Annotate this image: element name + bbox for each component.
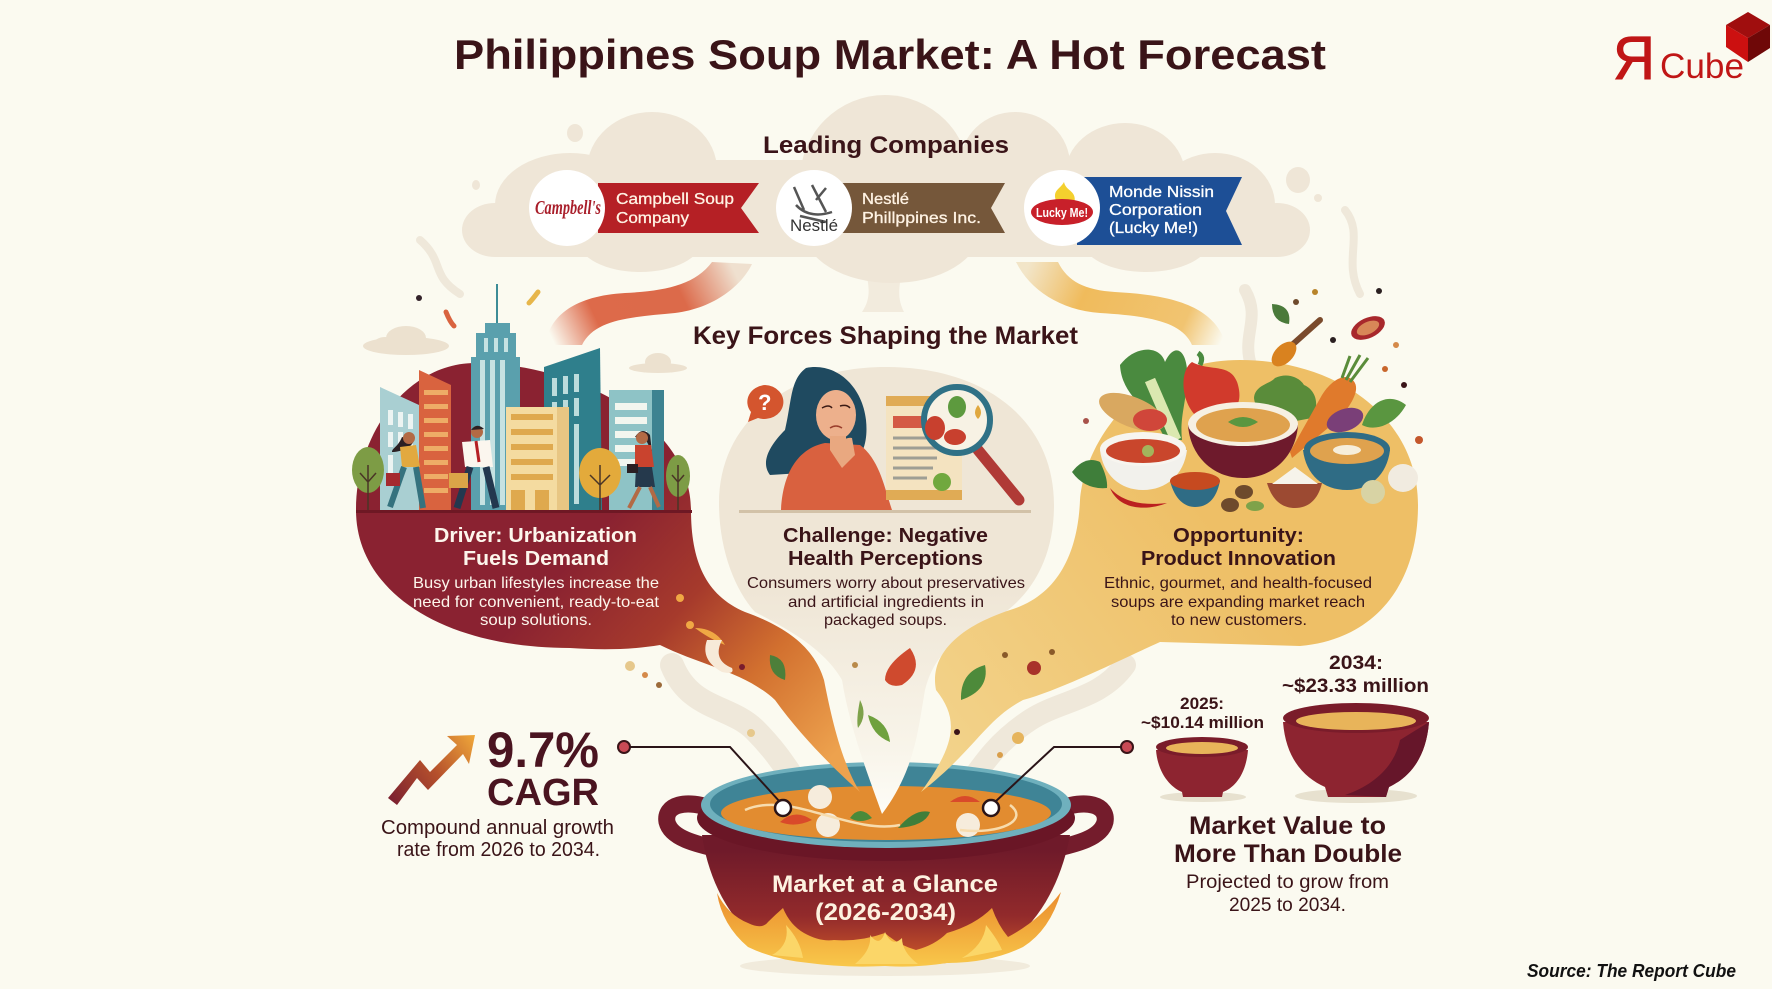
company: Nestle Philippines: Nestlé (790, 216, 838, 235)
illustration: worried woman reading label (739, 367, 1031, 513)
broccoli (1254, 376, 1316, 424)
challenge text: Health Perceptions (788, 548, 983, 570)
text: CAGR description: rate from 2026 to 2034. (397, 839, 600, 861)
company: Campbell Soup Company: Campbell's (535, 197, 601, 219)
label: 2034 value: 2034: (1329, 653, 1383, 674)
driver text: Driver: Urbanization (434, 525, 637, 547)
challenge text: and artificial ingredients in (788, 594, 984, 611)
panel: challenge bubble (719, 367, 1054, 814)
building dark teal (544, 348, 602, 511)
big bowl (1188, 402, 1298, 478)
driver text (413, 525, 660, 629)
garlic (1388, 464, 1418, 492)
company: Monde Nissin: Monde Nissin (1109, 184, 1214, 201)
label: 2034 value: ~$23.33 million (1282, 676, 1429, 697)
trees (352, 447, 384, 493)
logo: Report Cube (1613, 12, 1770, 92)
spoon (1292, 320, 1320, 345)
cabbage and herb (1323, 403, 1367, 437)
driver text: need for convenient, ready-to-eat (413, 594, 660, 611)
logo: Report Cube: Cube (1660, 47, 1744, 86)
ribbon: gold flow from cloud (1016, 262, 1226, 345)
chili and leaves (1110, 488, 1167, 508)
pot body (702, 835, 1070, 966)
building orange (419, 370, 451, 511)
company: Monde Nissin (1024, 170, 1242, 246)
body (781, 443, 892, 510)
bok choy (1120, 350, 1187, 440)
connector: market value to pot (983, 741, 1133, 816)
text: market value: 2025 to 2034. (1229, 895, 1346, 916)
text: CAGR description: Compound annual growth (381, 817, 614, 839)
driver text: soup solutions. (480, 612, 592, 629)
source note: Source: The Report Cube (1527, 961, 1736, 981)
icon: big bowl 2034 (1283, 703, 1429, 803)
hand (830, 438, 855, 468)
opportunity text: to new customers. (1171, 612, 1307, 629)
teal bowl (1303, 432, 1390, 490)
company: Nestle Philippines: Phillppines Inc. (862, 210, 981, 227)
label: 2025 value: 2025: (1180, 694, 1224, 713)
face (816, 390, 856, 440)
company: Campbell Soup Company: Company (616, 210, 689, 227)
flames (717, 892, 1061, 967)
question bubble (747, 385, 783, 422)
stat: 9.7% CAGR: 9.7% (487, 722, 599, 778)
text: market value (1174, 812, 1402, 916)
panel: driver bubble (356, 363, 860, 792)
question bubble: ? (758, 390, 771, 415)
challenge text (747, 525, 1025, 629)
icon: growth arrow (388, 735, 475, 805)
stat: 9.7% CAGR (487, 722, 599, 814)
company: Campbell Soup Company (529, 170, 759, 246)
logo: Report Cube: Я (1613, 24, 1655, 92)
company: Monde Nissin: (Lucky Me!) (1109, 220, 1198, 237)
hair (766, 367, 866, 475)
panel: opportunity bubble (921, 360, 1418, 792)
bell pepper (1183, 362, 1239, 416)
opportunity text: Opportunity: (1173, 525, 1304, 547)
illustration: soup pot (667, 762, 1105, 976)
text: CAGR description (381, 817, 614, 861)
pot label (772, 871, 998, 926)
company: Monde Nissin: Corporation (1109, 202, 1202, 219)
label package (886, 396, 962, 500)
challenge text: packaged soups. (824, 612, 947, 629)
tomato slice (1347, 311, 1389, 345)
person 1 (386, 432, 423, 508)
building cream (506, 407, 569, 511)
ground (356, 510, 692, 513)
ribbon: red flow from cloud (545, 262, 752, 345)
carrot (1290, 377, 1356, 458)
decor: food floating in streams (625, 594, 1055, 758)
opportunity text: Product Innovation (1141, 548, 1336, 570)
floating leaf and seeds (1083, 288, 1423, 444)
pot label: (2026-2034) (815, 899, 956, 926)
challenge text: Challenge: Negative (783, 525, 988, 547)
building left (380, 387, 419, 511)
heading: leading companies: Leading Companies (763, 132, 1009, 159)
sweet potato (1094, 385, 1170, 439)
connector: CAGR to pot (618, 741, 791, 816)
decor: floating dots near city (416, 292, 538, 326)
soup contents (745, 785, 1016, 837)
label: 2025 value (1141, 694, 1264, 732)
shelf line (739, 510, 1031, 513)
heading: key forces: Key Forces Shaping the Market (693, 322, 1079, 350)
challenge text: Consumers worry about preservatives (747, 575, 1025, 592)
coffee beans (1235, 485, 1253, 499)
stat: 9.7% CAGR: CAGR (487, 772, 599, 814)
label: 2025 value: ~$10.14 million (1141, 713, 1264, 732)
magnifier (978, 450, 1019, 500)
person 2 (449, 426, 496, 508)
pot handles (667, 804, 1105, 850)
text: market value: More Than Double (1174, 840, 1402, 868)
building teal right (609, 390, 664, 511)
company: Nestle Philippines: Nestlé (862, 191, 909, 208)
text: market value: Projected to grow from (1186, 872, 1389, 893)
text: market value: Market Value to (1189, 812, 1386, 840)
illustration: vegetables and soup bowls (1072, 288, 1423, 512)
panel: leading companies cloud (462, 95, 1322, 312)
pot label: Market at a Glance (772, 871, 998, 898)
driver text: Busy urban lifestyles increase the (413, 575, 659, 592)
white bowl (1100, 432, 1187, 490)
spire and tower (496, 284, 498, 324)
spice bowl (1170, 481, 1220, 507)
title: Philippines Soup Market: A Hot Forecast (454, 31, 1326, 78)
label: 2034 value (1282, 653, 1429, 697)
opportunity text: soups are expanding market reach (1111, 594, 1365, 611)
flour bowl (1267, 483, 1322, 508)
person 3 (627, 431, 659, 508)
company: Campbell Soup Company: Campbell Soup (616, 191, 734, 208)
company: Nestle Philippines (776, 170, 1005, 246)
opportunity text (1104, 525, 1372, 629)
clouds (363, 326, 687, 373)
illustration: city with commuters (352, 284, 692, 513)
driver text: Fuels Demand (463, 548, 609, 570)
icon: small bowl 2025 (1156, 737, 1248, 802)
steam wisps (420, 210, 1360, 795)
opportunity text: Ethnic, gourmet, and health-focused (1104, 575, 1372, 592)
company: Monde Nissin: Lucky Me! (1036, 205, 1088, 220)
